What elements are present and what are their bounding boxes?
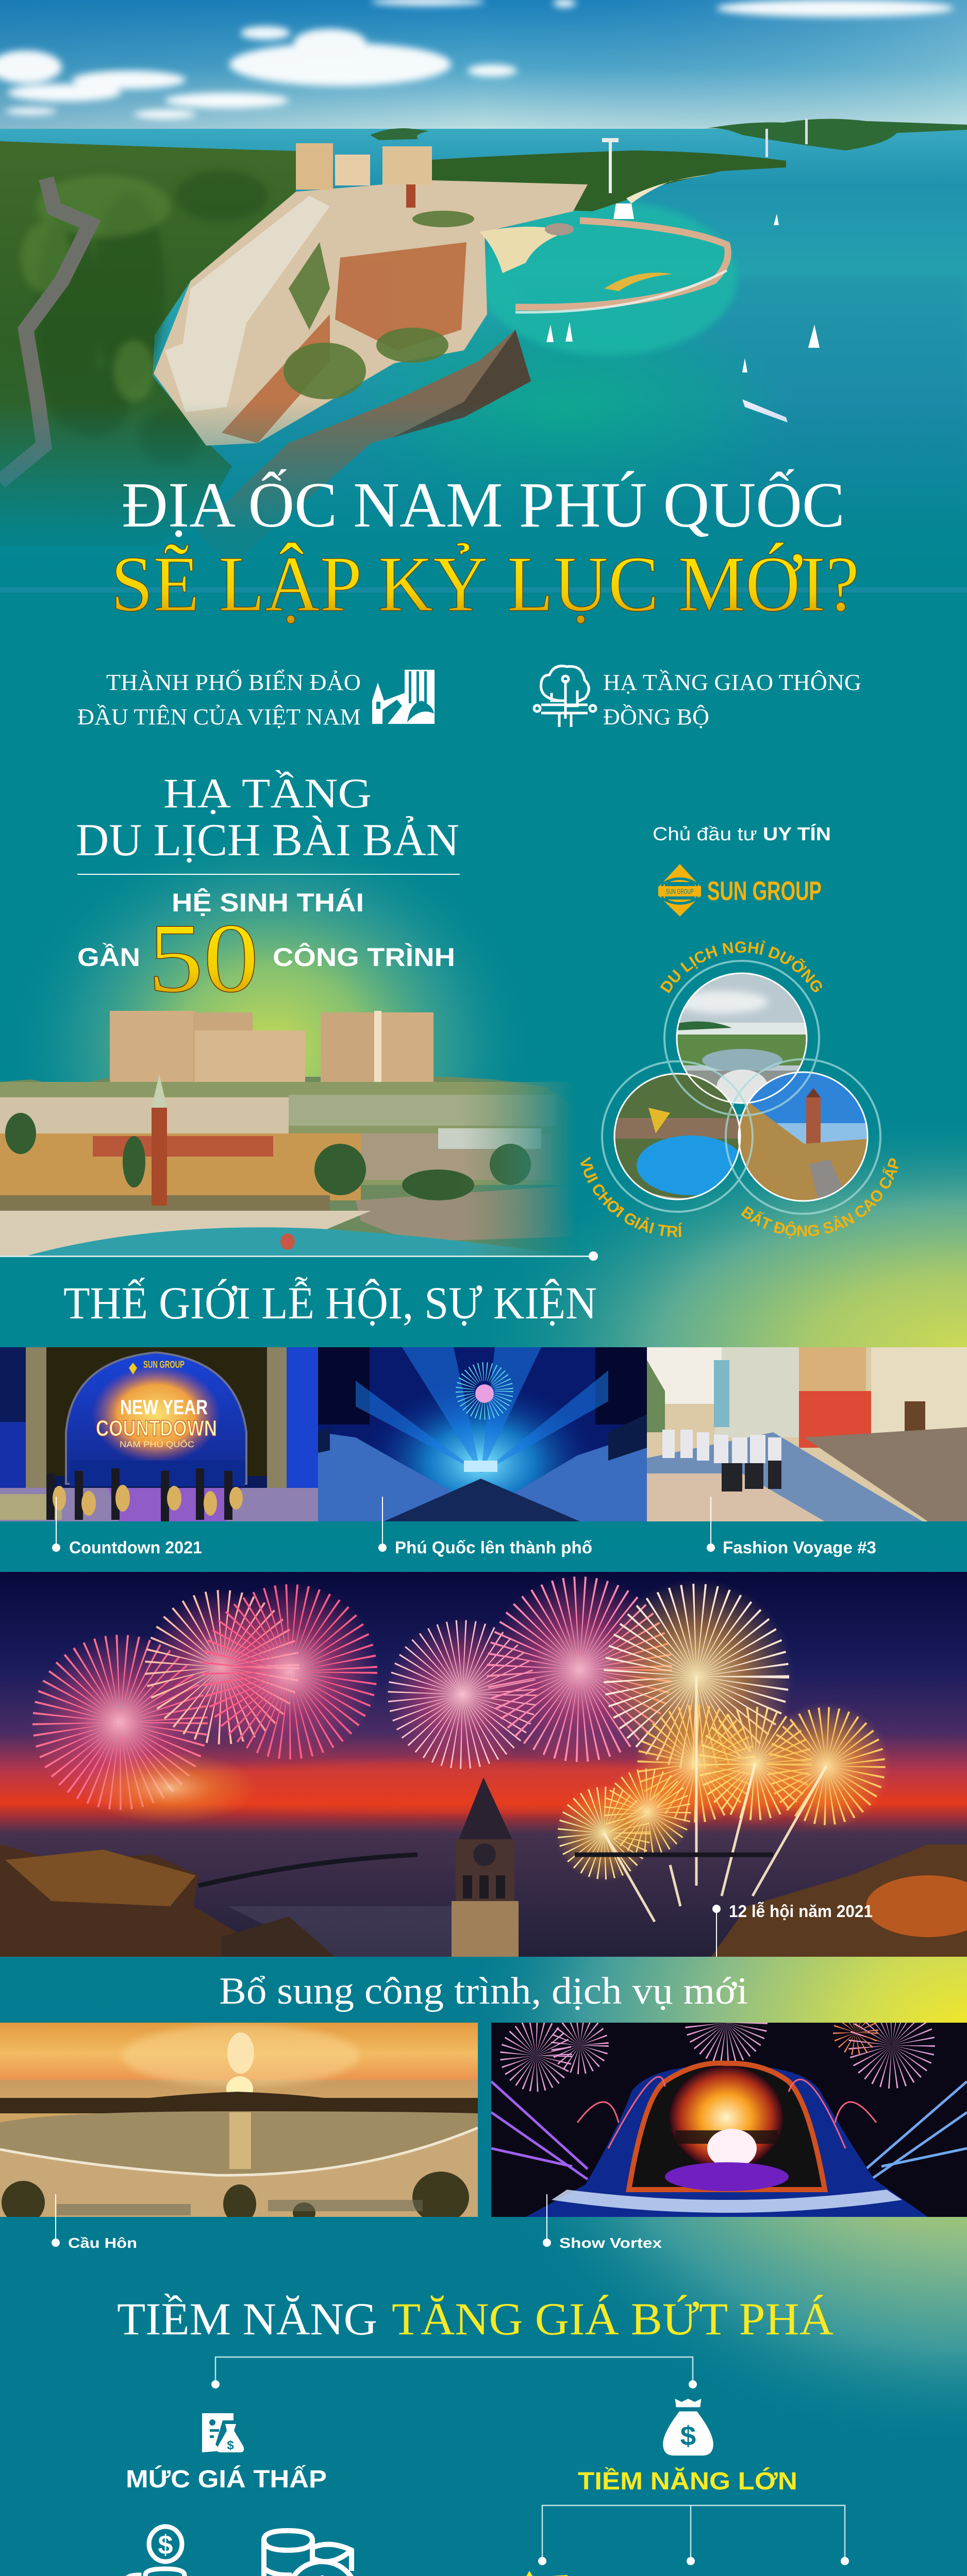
curved labels: VUI CHƠI GIẢI TRÍ: [580, 1156, 682, 1238]
number 50: 50: [148, 903, 259, 1013]
curved labels: [580, 940, 899, 1239]
icon: circuit tree: [534, 666, 596, 727]
curved labels: DU LỊCH NGHỈ DƯỠNG: [660, 940, 822, 993]
label: show vortex: [543, 2194, 662, 2251]
hero aerial photo: [0, 0, 967, 592]
feature: first island city: THÀNH PHỐ BIỂN ĐẢO: [106, 669, 361, 695]
firework bursts: [30, 1574, 891, 1922]
cable towers: [609, 142, 612, 193]
photo: fireworks: [0, 1572, 967, 1957]
photo: fashion voyage: [647, 1347, 967, 1521]
developer: [653, 823, 831, 917]
heading: tourism infrastructure: DU LỊCH BÀI BẢN: [76, 815, 459, 866]
ecosystem callout: HỆ SINH THÁI: [172, 888, 364, 917]
forest: [0, 141, 296, 546]
icon: coins phu quoc: $: [158, 2530, 173, 2560]
feature: synchronized transport: [534, 666, 861, 730]
curved labels: BẤT ĐỘNG SẢN CAO CẤP: [741, 1158, 899, 1239]
feature: first island city: [77, 669, 435, 730]
icon: money bag: [663, 2399, 713, 2455]
photo: countdown 2021: NEW YEAR: [120, 1396, 208, 1419]
road: [0, 178, 90, 482]
logo: sun group: SUN GROUP: [666, 887, 694, 895]
islands: [370, 128, 429, 140]
label: cau hon: Cầu Hôn: [68, 2235, 137, 2251]
heading: festivals: THẾ GIỚI LỄ HỘI, SỰ KIỆN: [63, 1277, 597, 1329]
photo: show vortex: [491, 2002, 967, 2217]
label: cau hon: [52, 2194, 137, 2251]
title line 2: SẼ LẬP KỶ LỤC MỚI?: [111, 540, 859, 628]
photo: countdown 2021: COUNTDOWN: [96, 1416, 217, 1441]
logo: sun group: SUN GROUP: [707, 876, 822, 906]
boats: [546, 204, 820, 372]
label: fashion voyage: Fashion Voyage #3: [723, 1538, 876, 1557]
label: low price: MỨC GIÁ THẤP: [126, 2465, 327, 2493]
label: show vortex: Show Vortex: [559, 2235, 662, 2251]
circle photo: resort: [677, 974, 806, 1103]
town: [154, 180, 588, 446]
rock shore: [196, 330, 531, 567]
photo: countdown 2021: NAM PHÚ QUỐC: [120, 1439, 194, 1449]
icon: coins nha trang: [264, 2531, 356, 2576]
venn ecosystem: [580, 940, 899, 1239]
photo: city celebration: [318, 1347, 647, 1521]
heading: price potential: TIỀM NĂNG: [117, 2294, 377, 2345]
label: fashion voyage: [707, 1497, 876, 1557]
icon: money bag: $: [680, 2421, 696, 2451]
icon: growth chart: [512, 2571, 568, 2576]
heading: tourism infrastructure: [76, 770, 460, 875]
heading: new attractions: Bổ sung công trình, dịch vụ mới: [219, 1970, 748, 2012]
label: city: [378, 1497, 592, 1557]
heading: price potential: TĂNG GIÁ BỨT PHÁ: [392, 2294, 833, 2345]
logo: sun group: [658, 864, 822, 917]
ecosystem callout: [77, 888, 455, 1013]
title: [111, 469, 859, 628]
icon: price tag with bag: $: [227, 2438, 234, 2452]
label: city: Phú Quốc lên thành phố: [395, 1538, 592, 1557]
label: countdown 2021: [52, 1497, 202, 1557]
ecosystem callout: CÔNG TRÌNH: [273, 942, 455, 972]
photo: countdown 2021: [0, 1347, 318, 1521]
icon: price tag with bag: [202, 2413, 244, 2452]
heading: tourism infrastructure: HẠ TẦNG: [163, 770, 372, 817]
feature: first island city: ĐẦU TIÊN CỦA VIỆT NAM: [77, 704, 361, 730]
title line 1: ĐỊA ỐC NAM PHÚ QUỐC: [122, 469, 845, 541]
circle photo: tower street: [740, 1073, 867, 1200]
feature: synchronized transport: HẠ TẦNG GIAO THÔNG: [603, 669, 861, 695]
label: 12 festivals: 12 lễ hội năm 2021: [729, 1902, 873, 1921]
shore and tower: [0, 1844, 278, 1957]
circle photo: water park: [615, 1075, 739, 1198]
tree connector right: [538, 2505, 849, 2565]
heading: price potential: [117, 2294, 833, 2345]
label: countdown 2021: Countdown 2021: [69, 1538, 202, 1557]
photo: kiss bridge: [0, 2023, 478, 2224]
icon: coins phu quoc: [126, 2527, 185, 2576]
icon: city: [372, 670, 435, 724]
beach and pier: [479, 227, 567, 273]
developer: Chủ đầu tư UY TÍN: [653, 823, 831, 844]
label: 12 festivals: [712, 1902, 873, 1957]
label: great potential: TIỀM NĂNG LỚN: [578, 2467, 797, 2495]
resort illustration: [0, 1011, 577, 1256]
ecosystem callout: GẦN: [77, 943, 140, 972]
feature: synchronized transport: ĐỒNG BỘ: [603, 704, 709, 730]
divider with dot: [0, 1251, 598, 1261]
photo: countdown 2021: SUN GROUP: [143, 1360, 185, 1370]
tree connector top: [211, 2357, 697, 2388]
